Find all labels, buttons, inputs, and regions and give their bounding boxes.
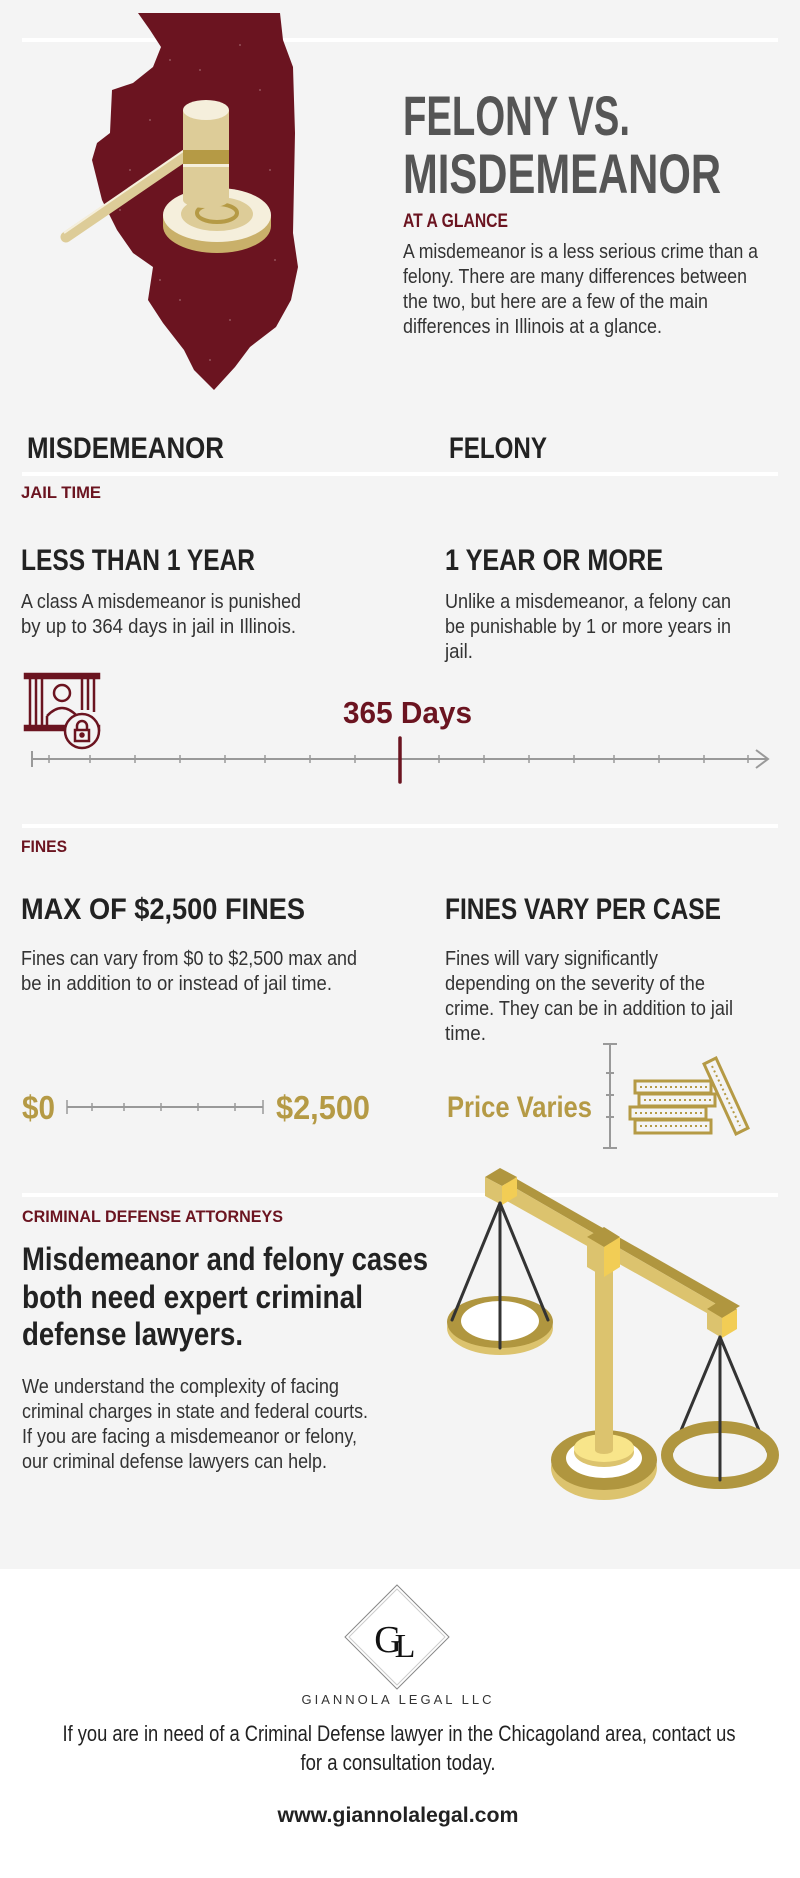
- fines range scale: $0: [22, 1089, 55, 1126]
- logo: G: [374, 1619, 402, 1661]
- panel: misdemeanor jail: A class A misdemeanor is punished: [21, 591, 301, 613]
- panel: felony fines: FINES VARY PER CASE: [445, 893, 721, 926]
- section label: fines: FINES: [21, 837, 67, 856]
- beam: [505, 1178, 740, 1312]
- gavel head: [183, 110, 229, 200]
- closing paragraph: [22, 1376, 368, 1473]
- title: [403, 84, 721, 205]
- cubes: [485, 1168, 517, 1186]
- gavel base: [163, 199, 271, 253]
- closing paragraph: our criminal defense lawyers can help.: [22, 1451, 327, 1473]
- panel: felony jail: be punishable by 1 or more years in: [445, 616, 731, 638]
- price varies with coins: [447, 1044, 748, 1148]
- panel: felony jail: Unlike a misdemeanor, a felony can: [445, 591, 731, 613]
- fines range scale: [22, 1089, 370, 1126]
- panel: misdemeanor fines: be in addition to or instead of jail time.: [21, 973, 332, 995]
- footer: www.giannolalegal.com: [276, 1804, 518, 1827]
- panel: misdemeanor jail: [21, 544, 301, 638]
- column headings: [27, 432, 547, 465]
- strings: [452, 1203, 768, 1480]
- panel: felony jail: [444, 544, 731, 663]
- panel: felony fines: depending on the severity of the: [445, 973, 705, 995]
- icon: jail: [25, 674, 99, 748]
- base: [551, 1436, 657, 1500]
- intro paragraph: A misdemeanor is a less serious crime than a: [403, 241, 759, 263]
- intro paragraph: differences in Illinois at a glance.: [403, 316, 662, 338]
- left pan: [447, 1301, 553, 1355]
- section label: criminal defense attorneys: CRIMINAL DEFENSE ATTORNEYS: [22, 1207, 283, 1226]
- closing paragraph: If you are facing a misdemeanor or felony,: [22, 1426, 357, 1448]
- column headings: FELONY: [449, 432, 547, 465]
- panel: misdemeanor jail: by up to 364 days in jail in Illinois.: [21, 616, 296, 638]
- title: FELONY VS.: [403, 84, 630, 147]
- footer: GIANNOLA LEGAL LLC: [302, 1692, 494, 1707]
- footer: [0, 1569, 800, 1878]
- column headings: MISDEMEANOR: [27, 432, 224, 465]
- section label: jail time: JAIL TIME: [21, 483, 101, 502]
- price varies with coins: Price Varies: [447, 1091, 592, 1124]
- heading: expert lawyers: both need expert criminal: [22, 1279, 363, 1315]
- fines range scale: $2,500: [276, 1089, 370, 1126]
- panel: felony fines: crime. They can be in addition to jail: [445, 998, 733, 1020]
- post: [595, 1250, 613, 1450]
- icon: scales of justice: [447, 1168, 773, 1500]
- logo: [345, 1585, 449, 1689]
- panel: felony jail: jail.: [444, 641, 473, 663]
- footer: for a consultation today.: [300, 1750, 496, 1775]
- heading: expert lawyers: Misdemeanor and felony cases: [22, 1241, 428, 1277]
- gavel handle: [66, 153, 189, 237]
- label: 365 days: 365 Days: [343, 695, 472, 730]
- panel: misdemeanor fines: [21, 893, 357, 995]
- intro paragraph: felony. There are many differences between: [403, 266, 747, 288]
- right pan: [667, 1455, 773, 1489]
- panel: felony jail: 1 YEAR OR MORE: [445, 544, 663, 577]
- panel: misdemeanor jail: LESS THAN 1 YEAR: [21, 544, 255, 577]
- timeline arrow: [32, 738, 768, 782]
- intro paragraph: [403, 241, 759, 338]
- intro paragraph: the two, but here are a few of the main: [403, 291, 708, 313]
- panel: misdemeanor fines: MAX OF $2,500 FINES: [21, 893, 305, 926]
- closing paragraph: criminal charges in state and federal courts.: [22, 1401, 368, 1423]
- logo: L: [395, 1628, 415, 1665]
- panel: felony fines: time.: [445, 1023, 486, 1045]
- panel: felony fines: Fines will vary significantly: [445, 948, 658, 970]
- panel: misdemeanor fines: Fines can vary from $0 to $2,500 max and: [21, 948, 357, 970]
- heading: expert lawyers: [22, 1241, 428, 1352]
- panel: felony fines: [445, 893, 733, 1045]
- heading: expert lawyers: defense lawyers.: [22, 1316, 243, 1352]
- icon: illinois map with gavel: [64, 13, 298, 390]
- closing paragraph: We understand the complexity of facing: [22, 1376, 339, 1398]
- subtitle: at a glance: AT A GLANCE: [403, 211, 508, 232]
